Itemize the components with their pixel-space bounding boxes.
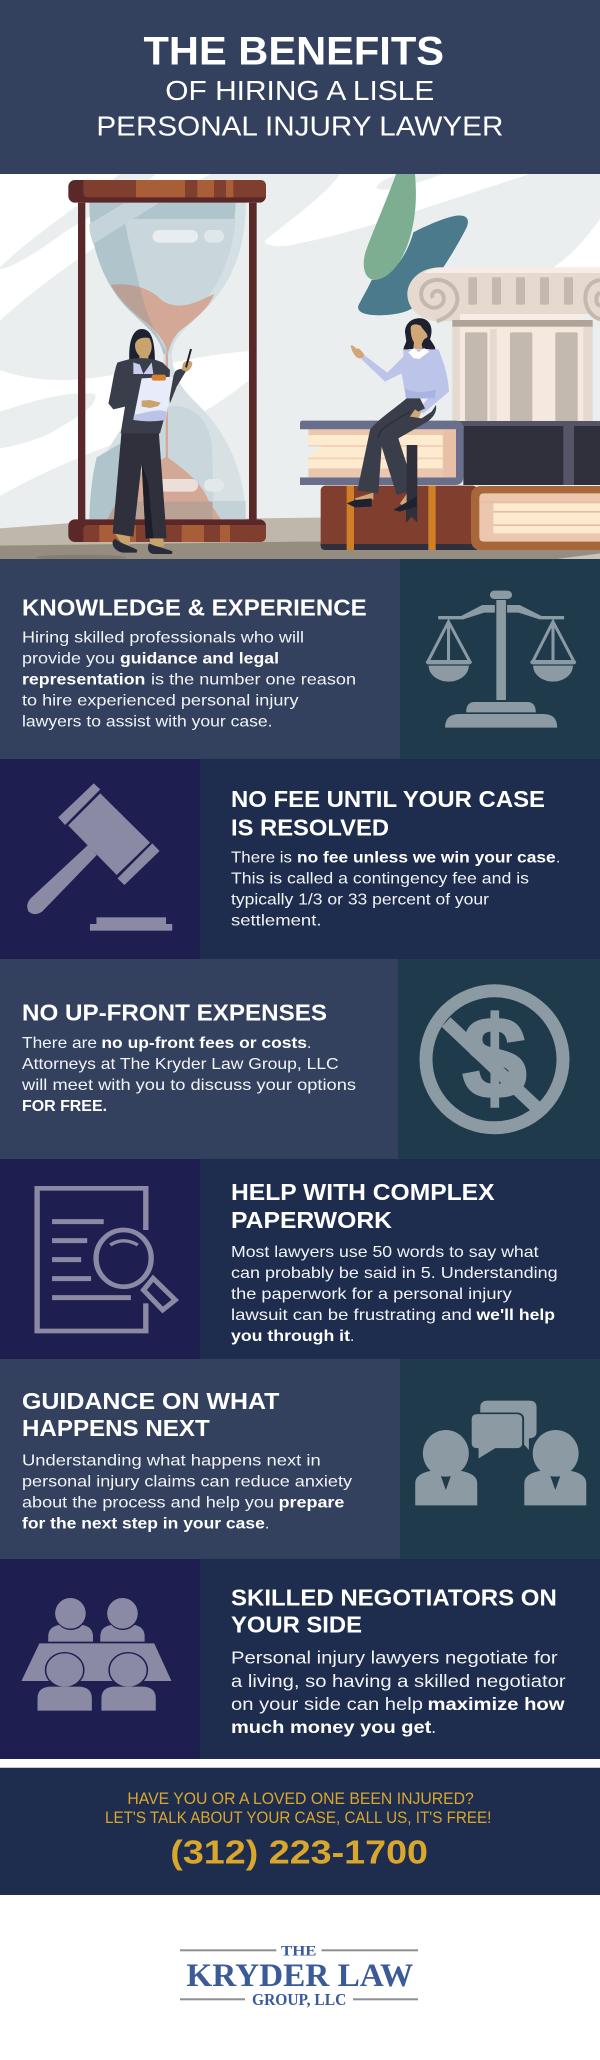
body text: representation <box>22 671 145 688</box>
icon: negotiation table <box>21 1598 171 1711</box>
books stack <box>300 421 600 550</box>
body text: FOR FREE. <box>22 1098 107 1115</box>
body text: . <box>350 1328 354 1345</box>
body text: on your side can help <box>231 1694 423 1714</box>
heading <box>231 786 545 841</box>
heading: SKILLED NEGOTIATORS ON <box>231 1585 557 1611</box>
icon: gavel <box>27 783 172 931</box>
body text: no fee unless we win your case <box>297 849 556 866</box>
heading: YOUR SIDE <box>231 1612 362 1638</box>
body text <box>231 1648 566 1737</box>
icon: scales of justice <box>426 591 576 728</box>
body text: much money you get <box>231 1717 432 1737</box>
body text: provide you <box>22 650 115 667</box>
body text: about the process and help you <box>22 1494 274 1511</box>
title: the benefits: THE BENEFITS <box>144 30 444 74</box>
body text: no up-front fees or costs <box>101 1035 307 1052</box>
heading: IS RESOLVED <box>231 815 389 841</box>
plant leaves <box>358 174 468 315</box>
body text: you through it <box>231 1328 350 1345</box>
body text <box>231 1244 558 1345</box>
body text: guidance and legal <box>120 650 279 667</box>
panel: complex paperwork <box>0 1159 600 1359</box>
body text: prepare <box>279 1494 345 1511</box>
body text: Personal injury lawyers negotiate for <box>231 1648 558 1668</box>
heading <box>231 1585 557 1638</box>
heading <box>22 1388 280 1441</box>
body text: the paperwork for a personal injury <box>231 1286 512 1303</box>
logo: the kryder law group <box>180 1944 418 2009</box>
body text: personal injury claims can reduce anxiety <box>22 1473 352 1490</box>
icon: document with magnifier <box>37 1188 175 1331</box>
icon: no dollar sign <box>426 991 563 1128</box>
heading: HAPPENS NEXT <box>22 1415 210 1441</box>
body text: . <box>556 849 560 866</box>
body text: There are <box>22 1035 97 1052</box>
body text: lawsuit can be frustrating and <box>231 1307 472 1324</box>
subtitle line one: OF HIRING A LISLE <box>165 75 434 106</box>
panel: knowledge and experience <box>0 559 600 759</box>
body text: to hire experienced personal injury <box>22 692 299 709</box>
body text <box>231 849 560 929</box>
body text <box>22 1452 352 1532</box>
body text: lawyers to assist with your case. <box>22 713 272 730</box>
body text: . <box>307 1035 311 1052</box>
body text: Hiring skilled professionals who will <box>22 629 304 646</box>
body text: This is called a contingency fee and is <box>231 870 529 887</box>
heading: KNOWLEDGE & EXPERIENCE <box>22 595 367 621</box>
body text: maximize how <box>428 1694 565 1714</box>
body text: Understanding what happens next in <box>22 1452 321 1469</box>
panel: no fee until resolved <box>0 759 600 959</box>
seated woman <box>347 318 449 523</box>
heading: NO FEE UNTIL YOUR CASE <box>231 786 545 812</box>
hourglass <box>68 180 266 542</box>
heading <box>231 1179 495 1233</box>
body text: for the next step in your case <box>22 1515 265 1532</box>
body text: we'll help <box>475 1307 555 1324</box>
body text <box>22 629 356 730</box>
cta text: LET'S TALK ABOUT YOUR CASE, CALL US, IT'S FREE! <box>105 1809 491 1827</box>
heading: GUIDANCE ON WHAT <box>22 1388 280 1414</box>
panel: title header <box>0 0 600 174</box>
logo: the kryder law group: THE <box>281 1944 316 1960</box>
icon: two people talking <box>415 1401 586 1505</box>
heading: NO UP-FRONT EXPENSES <box>22 1000 327 1026</box>
subtitle line two: PERSONAL INJURY LAWYER <box>96 111 503 142</box>
heading: HELP WITH COMPLEX <box>231 1179 495 1205</box>
body text: Most lawyers use 50 words to say what <box>231 1244 539 1261</box>
body text: settlement. <box>231 912 322 929</box>
body text: typically 1/3 or 33 percent of your <box>231 891 489 908</box>
body text: Attorneys at The Kryder Law Group, LLC <box>22 1056 339 1073</box>
body text: a living, so having a skilled negotiator <box>231 1671 566 1691</box>
icon: no dollar sign: $ <box>462 993 527 1123</box>
panel: call to action <box>0 1768 600 1895</box>
cta text: HAVE YOU OR A LOVED ONE BEEN INJURED? <box>127 1790 474 1808</box>
body text: is the number one reason <box>151 671 356 688</box>
panel: what happens next <box>0 1359 600 1559</box>
body text: . <box>265 1515 269 1532</box>
body text <box>21 1035 356 1115</box>
body text: There is <box>231 849 292 866</box>
illustration: hourglass, lawyers, books and column <box>0 174 600 560</box>
ground <box>0 517 600 560</box>
cta text <box>105 1790 491 1827</box>
phone number: (312) 223-1700 <box>170 1833 428 1870</box>
classical column <box>407 267 600 429</box>
body text: will meet with you to discuss your options <box>21 1077 356 1094</box>
panel: skilled negotiators <box>0 1559 600 1759</box>
body text: . <box>431 1717 436 1737</box>
panel: no up-front expenses <box>0 959 600 1159</box>
heading: PAPERWORK <box>231 1207 392 1233</box>
body text: can probably be said in 5. Understanding <box>231 1265 558 1282</box>
woman with clipboard <box>108 329 192 554</box>
logo: the kryder law group: GROUP, LLC <box>252 1990 346 2009</box>
logo: the kryder law group: KRYDER LAW <box>186 1958 413 1994</box>
